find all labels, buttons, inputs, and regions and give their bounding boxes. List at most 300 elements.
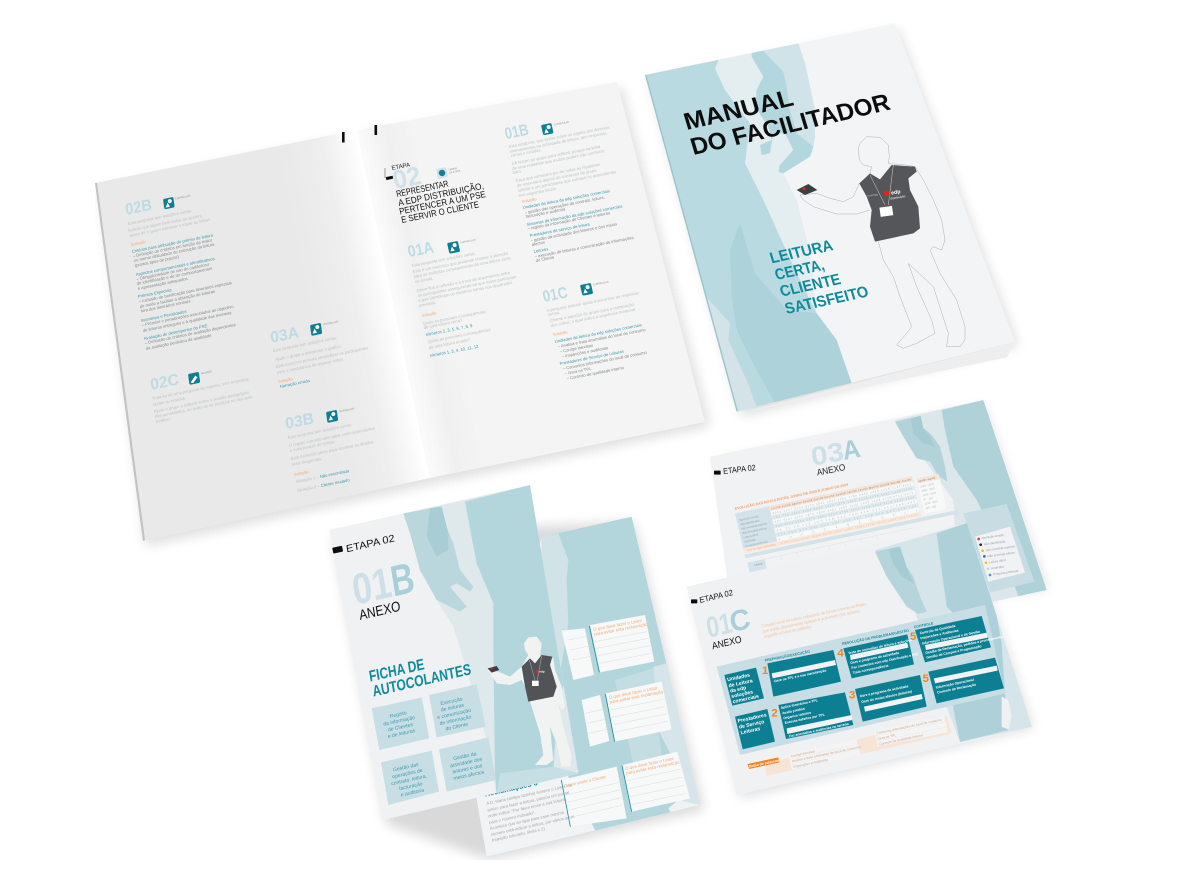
sticker box 4: actividade dos [450, 756, 483, 769]
illustration: meter reader: distribuição [890, 194, 906, 201]
panel: open manual, left page [95, 130, 430, 541]
illustration: meter reader: ao serviço [867, 193, 879, 198]
block 03A: para a importância de registar notas. [276, 356, 344, 375]
block 03B: e evita perdas de tempo. [289, 439, 335, 453]
box: what the reader should do, row 3 [622, 752, 690, 812]
step box 5 bottom: Informação Operacional [935, 678, 974, 690]
sticker box 1: Registo [389, 710, 407, 720]
block 01A: Este é um exercício que pretende chamar a atenção [412, 250, 509, 274]
step box 2 [771, 692, 853, 739]
panel: open manual, right page [357, 82, 705, 478]
block 01B: facturação e auditoria [525, 206, 566, 219]
block 01C: – Inspecções e auditorias [561, 345, 609, 359]
step box 4: Trata correspondência [852, 664, 889, 675]
icon: time [436, 164, 461, 179]
block 01C: – Analisa e trata anomalias do local de consumo [557, 327, 647, 349]
heading: annex code [809, 433, 862, 478]
step box 1 [762, 650, 841, 697]
sticker box 2: de informação [439, 714, 472, 727]
data table: 14325 15842 12547 13254 14125 13547 14852 15987 16254 15847 14987 15247 16325 [779, 512, 919, 545]
table heading: EVOLUÇÃO DAS NOTAS ENTRE JUNHO DE 2008 E JUNHO DE 2009 [734, 482, 849, 511]
block 02B: Incentivos e Penalidades [140, 309, 187, 323]
step heading [385, 160, 487, 225]
block 01C: certas. [547, 310, 561, 317]
sticker box 2: e comunicação [437, 708, 472, 721]
row label: units: comerciais [732, 694, 760, 705]
data table: totals: 87 · 124 [923, 496, 934, 502]
block 02B: da avaliação periódica da qualidade [145, 333, 212, 351]
text block: complaint case: (rejeição relevado, libéis e 2) [491, 826, 546, 843]
step box 4: Gere e programa da actividade [850, 651, 900, 665]
legend panel: Pesquisa potencial [993, 569, 1019, 576]
column headers [764, 621, 934, 663]
block 01A: números 1, 3, 4, 10, 11, 12 [429, 344, 480, 358]
icon: curricular: CURRICULAR [593, 280, 609, 286]
data table: totals: 1780 · 5570 [924, 499, 939, 506]
block 02B: – Definição de critérios em função da maior [132, 237, 213, 258]
icon: curricular: CURRICULAR [339, 407, 355, 413]
data table: 752 752 2054 3289 2864 1422 1475 2068 2110 4578 6421 1250 2170 [773, 486, 913, 519]
block 01C: Unidades de leitura da edp soluções comerciais [554, 322, 642, 344]
sticker box 1: e de leituras [387, 728, 416, 740]
sticker box 4: Gestão da [453, 751, 477, 762]
panel: manual cover [640, 23, 1015, 420]
sticker box 4 [439, 737, 496, 792]
step box 2: Aplica itinerários e TPL [780, 698, 818, 710]
step box 5 top: Inspecções e Auditorias [920, 628, 959, 640]
block 02B: 02B [124, 197, 153, 219]
block 01B: certas e erradas. [510, 147, 542, 158]
step box 5 top: 5 [910, 631, 916, 643]
block 03B: Este exercício serve para clarificar os direitos [290, 439, 374, 461]
block 02B: fora dos itinerários normais [140, 298, 191, 313]
data table: totals: 1542 · 1644 [922, 490, 937, 497]
block 02C: certas ou erradas. [152, 395, 186, 407]
subtitle: SATISFEITO [783, 284, 871, 318]
block 01B: Unidades de leitura da edp soluções comerciais [522, 188, 610, 210]
block 01B: – gestão da actividade dos leitores e dos meios [530, 221, 618, 243]
block 01C: – Comunica informações do local de consumo [562, 350, 648, 371]
word bag: Corrige inexatas [790, 749, 816, 758]
step box 5 bottom: Controlo de Reclamação [937, 683, 976, 695]
block 03B: Solução [293, 469, 310, 477]
block 02B: – Inclusão de bonificação para itinerários especiais [138, 280, 232, 304]
word bag: Comunica informações do local de consumo [876, 718, 942, 735]
step heading: ETAPA [391, 163, 411, 172]
heading: sticker form: AUTOCOLANTES [371, 661, 472, 701]
sheet: annex 01B sticker form [329, 485, 580, 820]
subtitle: LEITURA [768, 237, 835, 267]
word bag: Controlo de qualidade interno [879, 733, 923, 746]
block 03A [269, 319, 368, 389]
heading: annex code [704, 602, 753, 652]
icon: curricular: CURRICULAR [553, 121, 570, 127]
block 03B: 03B [284, 410, 315, 433]
box: what the client feels, row 3: O que sente o Cliente [564, 774, 607, 788]
box: what the reader should do, row 2 [605, 682, 672, 742]
sheet: back form with stickers [477, 517, 700, 857]
block 01A: previstos. [418, 300, 437, 308]
box: what the client feels, row 3 [561, 767, 627, 827]
block 02B: Solução [130, 239, 147, 247]
block 01C: – Gera os TPL [564, 366, 592, 376]
step box 5 bottom: 5 [923, 673, 929, 685]
data table [735, 469, 959, 558]
block 01C: Chame a atenção do grupo para a numeração [549, 302, 635, 323]
lower row table [747, 528, 917, 576]
data table: Total de notas planeadas [746, 542, 777, 552]
block 01C: Solução [552, 329, 569, 337]
block 02B: Prémios Especiais [137, 287, 172, 299]
step box 4: Faz contactos com edp Distribuição e PSE [851, 652, 920, 670]
block 03A: 03A [269, 324, 300, 347]
step heading: 02 [390, 160, 424, 195]
subtitle: CLIENTE [778, 271, 843, 301]
block 01B: Leitores [533, 246, 549, 254]
block 03B: mais frequentes. [291, 456, 322, 467]
data table: Leitura difícil [743, 532, 759, 539]
legend panel: Não invertida superior [985, 544, 1015, 552]
block 01A: Solução [421, 310, 438, 318]
text block: complaint case: para o número indicado". [489, 810, 536, 825]
text block: complaint case: amizo para fazer a leitura, passou um postal [487, 790, 570, 813]
data table: totals: 4067 · 3570 [920, 482, 935, 489]
step heading: PERTENCER A UM PSE [398, 189, 487, 216]
block 01A: de uma leitura errada? [428, 337, 471, 350]
block 02C: Ajude o grupo a reflectir sobre o sentido pedagógico [153, 389, 250, 414]
heading: step: ETAPA 02 [345, 533, 396, 555]
text block: complaint case: Acontece que ao ligar para esse mesmo [489, 810, 565, 831]
row label: units [724, 668, 764, 706]
data table: Pesquisa potencial [745, 539, 768, 548]
data table: totals: Ago/08 · Ago/09 [918, 477, 936, 483]
title: MANUAL [681, 85, 797, 136]
sticker box 3: facturação [399, 781, 423, 792]
row label: units: da edp [729, 685, 747, 695]
row label: providers [735, 709, 775, 749]
block 01B [503, 120, 634, 263]
step box 2: 2 [771, 708, 778, 720]
step box 2: Faz anomalias e auditorias no terreno [789, 722, 849, 738]
step box 4 [837, 634, 920, 678]
block 01B: Esta pergunta, que existe sobre os papéis dos diversos [508, 125, 610, 149]
column headers: RESOLUÇÃO DE PROBLEMAS/GESTÃO [842, 628, 910, 646]
illustration: meter reader: edp [891, 189, 902, 197]
row label: providers: de Serviço [738, 719, 765, 731]
block 01B: de uma realidade que muitos podem não conhecer [512, 148, 606, 171]
word bag: Inspecções e Auditorias [793, 758, 829, 769]
block 01C: – Controlo de qualidade interno [566, 365, 625, 381]
heading: annex code: 01 [704, 607, 735, 645]
block 01A: ou errada. [414, 275, 434, 284]
icon: curricular [541, 120, 571, 135]
step box 2: Organiza roteiros [783, 711, 811, 720]
block 02B: de identificação e de ter comportamentos [136, 266, 212, 286]
sticker box 3: Gestão das [393, 762, 420, 773]
block 02C: 02C [149, 371, 180, 394]
block 03A: Esta pergunta tem soluções certas. [272, 335, 337, 353]
block 03B: Situação 2 – Cliente mudado [296, 477, 351, 493]
sticker box 1: da informação [383, 715, 416, 728]
block 02B: de leituras entregues e à qualidade das mesmas [142, 310, 232, 333]
heading: annex code: C [727, 602, 753, 639]
sticker box 1 [372, 697, 429, 750]
block 03B [284, 406, 375, 493]
data table: Não invertida superior [741, 521, 768, 531]
data table: 86 75 96 514 247 368 421 789 654 912 312 105 240 [776, 499, 916, 532]
heading: annex code: B [387, 554, 418, 606]
step box 5 top: Controlo de Qualidade [919, 624, 956, 635]
box: what the reader should do, row 1: para evitar esta reclamação [594, 621, 648, 637]
sheet: annex 01C diagram [687, 523, 1032, 795]
block 01B: 01B [503, 121, 530, 143]
box: what the reader should do, row 1: O que deve fazer o Leitor [593, 618, 643, 632]
block 01C: Prestadores de Serviço de Leituras [559, 349, 624, 366]
block 01B: – gestão das operações de contrato, leitura, [524, 195, 605, 215]
data table: totals: 125 · 288 [925, 504, 937, 510]
data table: totals: 2945 · 3647 [921, 486, 936, 493]
step box 1: Gere os TPL e a sua manutenção [774, 668, 827, 683]
data table: totals [917, 474, 947, 514]
tab marker [342, 132, 345, 142]
text block: complaint case [484, 778, 575, 843]
block 02B: – Definição de critérios de avaliação dependentes [144, 322, 236, 345]
block 03B: Esta pergunta tem soluções certas. [287, 422, 352, 440]
block 01A: Esta pergunta tem soluções certas. [411, 251, 476, 268]
block 01A: Quais as possíveis consequências [427, 327, 491, 344]
block 01A: de uma leitura certa? [423, 317, 463, 330]
data table: 3 4 2 5 7 3 4 2 1 5 3 2 2 [778, 508, 918, 541]
sticker box 3: operações de [392, 768, 423, 780]
block 02B: Aspectos comportamentais e identificativos [135, 256, 215, 277]
lower row table: Leitura [754, 561, 763, 567]
icon: time: DA ETAPA [449, 169, 461, 175]
sticker box 2: Execução [440, 696, 463, 707]
block 02B: ou menor dificuldade de execução da leitura [133, 241, 215, 263]
block 01A: números 2, 3, 5, 6, 7, 8, 9 [425, 323, 474, 337]
text block: complaint case: onde indica: "Por favor envie a sua leitura [488, 797, 566, 819]
legend panel: Não invertida inferior [987, 551, 1015, 558]
block 01A: e que identificam os números certos nos quadrados [418, 280, 513, 303]
box: what the client feels, row 2 [582, 695, 609, 747]
box: what the reader should do, row 2: O que deve fazer o Leitor [608, 685, 659, 700]
block 02B: – Obrigatoriedade de uso do cartão/cod [136, 262, 210, 281]
block 01B: Sistemas de informação da edp soluções comerciais [526, 204, 623, 227]
data table: 274 509 147 211 124 147 231 257 268 312 247 178 215 [777, 504, 917, 537]
heading: annex code: ANEXO [711, 634, 743, 652]
step box 4: 4 [837, 647, 844, 659]
block 02B: Avaliação de desempenho do PSE [143, 323, 208, 341]
step heading: REPRESENTAR [395, 179, 450, 199]
step box 3: Gere do meios afectos (leituras) [861, 689, 912, 704]
block 02B: Critérios para atribuição do prémio de leitura [131, 232, 214, 254]
illustration: meter reader: edp [539, 670, 545, 674]
word bag [748, 716, 952, 776]
diagram panel [717, 605, 1005, 755]
instruction text: que estão directamente ligadas à actividade dos actores, [762, 608, 861, 634]
heading: annex code: 01 [349, 559, 395, 615]
data table: 3252 2637 2154 2150 3542 1420 1560 2750 2475 3490 4705 7237 3242 [772, 482, 912, 515]
block 01B: intervenientes na actividade de leitura, tem respostas [509, 130, 607, 154]
block 02B: Esta pergunta tem soluções certas. [127, 208, 192, 226]
sheet: annex 03A table [710, 400, 1053, 657]
block 02B [124, 193, 236, 351]
step box 3: 3 [849, 690, 855, 702]
block 03B: O registo correcto das notas evita reclamações [288, 426, 375, 448]
column headers: CONTROLE [913, 621, 934, 629]
sticker box 2: de leituras [441, 702, 465, 713]
block 02B: Solicite que sigam bem todas as opções, [127, 213, 203, 233]
block 01B: de resposta e depois do consenso do grupo [516, 167, 598, 188]
block 02B: (pontos tipos de prazos) [134, 254, 180, 268]
text block: complaint case: A D. Maria (antiga vizinha) sempre o Leitor, de [486, 782, 573, 806]
row label: providers: Leituras [740, 726, 761, 736]
shadows under book and sheets [100, 30, 1047, 860]
step box 3: Gere a programa da actividade [859, 684, 909, 698]
row label: units: Unidades [727, 672, 751, 683]
block 01C [541, 280, 648, 381]
step box 5 top [910, 616, 1004, 662]
heading: annex code: A [840, 433, 862, 466]
step box 1: 1 [762, 665, 768, 677]
step box 3 [849, 675, 927, 722]
illustration: meter reader [797, 137, 965, 348]
block 01B: Prestadores de serviço de leitura [529, 221, 591, 238]
step box 5 top: Gestão de Reclamação, pedidos e procedimentos [925, 635, 1004, 655]
sticker box 3: contrato, leitura, [391, 773, 428, 787]
heading: step [332, 533, 396, 555]
block 01B: bem. [512, 168, 522, 175]
data table: Não invertida inferior [742, 526, 767, 535]
step box 2: Executa defeitos por TPL [784, 713, 825, 725]
sticker box 2: do Cliente [445, 722, 469, 732]
heading: annex code: ANEXO [358, 599, 402, 624]
data table: 845 4752 1254 1278 1547 1247 4789 3354 7854 2354 6214 1245 2548 [775, 495, 915, 528]
word bag: Analisa e trata anomalias do local de consumo [791, 745, 861, 763]
data table: Anomalia [744, 537, 756, 544]
block 01C: 01C [541, 283, 570, 306]
block 03A: Este exercício procura sensibilizar os participantes [275, 345, 368, 369]
sticker box 2 [429, 684, 486, 737]
block 02B: de modo a facilitar a obtenção de leituras [139, 289, 215, 309]
block 01B: Solução [521, 196, 538, 204]
step box 4: Trata de anomalias de leitura e soluções [848, 638, 912, 655]
block 03A: Narração errada [279, 378, 311, 389]
block 01B: nos seguintes locais: [518, 186, 557, 198]
block 01B: – execução de leituras e comunicação de informações [534, 235, 634, 259]
icon: curricular: CURRICULAR [323, 320, 339, 326]
block 01B: do Cliente [535, 254, 555, 263]
icon: time: TEMPO [448, 167, 457, 172]
block 03B: Situação 1 – Não encontrada [295, 468, 350, 484]
box: what the reader should do, row 3: para evitar esta reclamação [626, 759, 680, 776]
sticker box 3: e auditoria [400, 787, 425, 799]
block 01A: Quais as possíveis consequências [422, 309, 486, 326]
icon: curricular: CURRICULAR [175, 194, 191, 201]
heading: step: ETAPA 02 [699, 588, 734, 605]
block 01A: para as múltiplas consequências de uma leitura certa [413, 255, 512, 279]
block 01C: dos cubos, o qual indica a sequência temporal. [550, 307, 637, 328]
word bag: Gera os TPL [877, 733, 897, 741]
sticker box 3 [381, 751, 439, 805]
icon: reunião: REUNIÃO [201, 370, 212, 375]
block 02C: Trata-se de uma pergunta de reposta, sem respostas [151, 376, 249, 401]
legend panel: Leitura difícil [989, 558, 1007, 564]
column headers: PREPARAÇÃO/EXECUÇÃO [764, 649, 811, 663]
step heading: A EDP DISTRIBUIÇÃO, [397, 181, 485, 208]
step box 5 top: Gestão de Campos e Programação [926, 644, 982, 660]
heading: annex code: ANEXO [816, 462, 846, 478]
block 01A [406, 238, 517, 358]
block 01B: Faça que comecem por ler todas as hipóteses [515, 162, 600, 183]
box: what the reader should do, row 2: para evitar esta reclamação [609, 689, 664, 705]
step box 5 bottom [923, 658, 1004, 703]
step box 2: Avalia prédios [782, 707, 805, 715]
row label: units: de Leitura [728, 678, 753, 689]
row label: providers: Prestadores [737, 712, 767, 725]
instruction text: segundo a bolsa de palavras. [763, 624, 813, 639]
icon: curricular: CURRICULAR [460, 238, 476, 244]
box: what the reader should do, row 3: O que deve fazer o Leitor [625, 756, 675, 771]
block 02B: e apresentação adequados [137, 276, 188, 291]
box: what the reader should do, row 1 [589, 615, 654, 672]
data table: Não identificada [740, 518, 760, 526]
data table: Narração errada [739, 514, 760, 522]
sticker box 4: meios afectos [453, 769, 485, 782]
block 02B: antes de o grupo começar a traçar as linhas. [129, 216, 211, 238]
legend panel [963, 504, 1034, 593]
sticker box 1: de Clientes [388, 722, 414, 733]
heading: sticker form: FICHA DE [368, 656, 426, 686]
block 01B: Dê tempo ao grupo para reflectir porque na linha [511, 144, 601, 166]
data table: 485 7567 2150 1270 1548 3421 1845 2145 2487 1254 3218 8742 5470 [774, 491, 914, 524]
title: DO FACILITADOR [687, 89, 893, 161]
block 01C: – Corrige inexatas [559, 343, 593, 354]
text block: complaint case: Reclamações 6 [484, 778, 538, 799]
heading: annex code: 03 [809, 436, 846, 472]
subtitle [768, 237, 871, 318]
word bag: Bolsa de palavras [749, 758, 779, 769]
legend panel: Não identificada [983, 539, 1006, 546]
sticker box 4: leitores e dos [452, 763, 483, 776]
illustration: meter reader [488, 637, 572, 767]
icon: curricular [163, 193, 192, 209]
text block: complaint case: número está indicar a leitura, por vários anos. [490, 814, 575, 837]
step heading: E SERVIR O CLIENTE [400, 199, 480, 225]
block 03A: Ajude o grupo a interpretar o gráfico. [274, 343, 342, 362]
row label: units: soluções [731, 689, 754, 700]
block 02B: – Prémios e penalizações associados ao objectivo [141, 304, 235, 327]
instruction text: Complemente os cubos, colocando de forma correcta as frases [761, 601, 867, 629]
block 01A: os participantes assegurando-se que todos participam [417, 274, 517, 298]
block 02C: das penalidades, ao invés de se focalizar no seu lado [154, 394, 253, 419]
block 01B: afectos [531, 240, 545, 247]
block 01B: – registo da informação de Clientes e leituras [527, 210, 610, 231]
subtitle: CERTA, [773, 257, 827, 284]
block 02C [149, 369, 253, 424]
tab marker [374, 125, 377, 135]
heading: annex code [349, 554, 418, 624]
block 01B: solicite a um participante que coloque os autocolantes [517, 169, 617, 193]
legend panel: Anomalia [991, 565, 1004, 570]
legend panel: Narração errada [981, 533, 1004, 540]
block 01C: A pergunta anterior ajuda a encontrar as respostas [546, 290, 639, 313]
block 01A: Deixe fluir a reflexão e a troca de argumentos entre [416, 270, 511, 293]
data table: Jun/08 Jul/08 Ago/08 Set/08 Out/08 Nov/08 Dez/08 Jan/09 Fev/09 Mar/09 Abr/09 Mai/09 Jun/09 [771, 477, 912, 511]
box: what the client feels, row 1 [562, 628, 594, 680]
block 01A: 01A [406, 238, 436, 261]
block 03A: Solução [277, 376, 294, 384]
